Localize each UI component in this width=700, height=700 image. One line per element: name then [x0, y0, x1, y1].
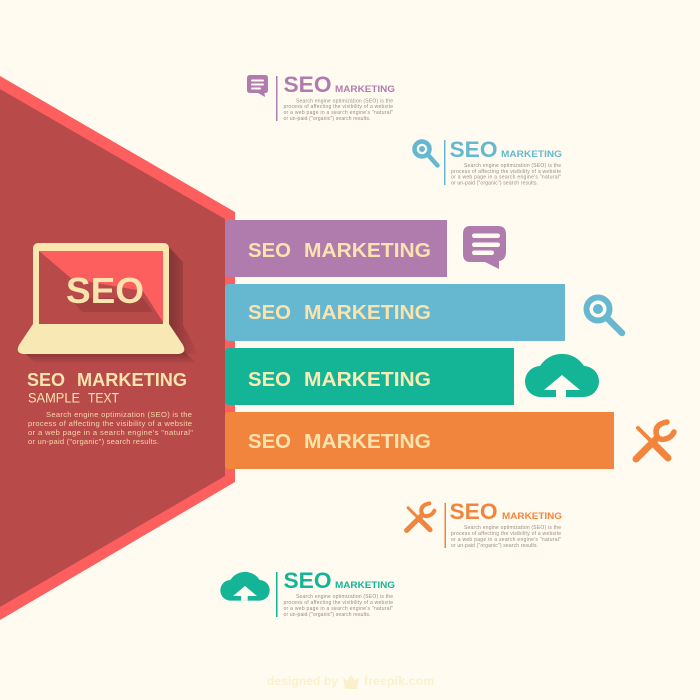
callout: teal: Search engine optimization (SEO) is the [296, 594, 393, 600]
callout: orange [407, 499, 562, 549]
description text: Search engine optimization (SEO) is the [46, 410, 192, 419]
subheading [28, 390, 119, 406]
callout: orange: MARKETING [502, 511, 562, 522]
bar: blue: SEO [248, 301, 291, 324]
callout: teal [220, 568, 395, 618]
description text: or a web page in a search engine's "natural" [28, 428, 193, 437]
bar: teal: MARKETING [304, 368, 431, 391]
blue icon [414, 142, 438, 166]
bar: teal [225, 348, 514, 405]
credit: freepik.com [364, 674, 434, 688]
callout: purple: Search engine optimization (SEO) is the [296, 98, 393, 104]
callout: purple: process of affecting the visibility of a website [284, 104, 393, 110]
callout: teal: or un-paid ("organic") search results. [284, 612, 370, 618]
main heading: MARKETING [77, 369, 187, 390]
callout: purple: or un-paid ("organic") search results. [284, 116, 370, 122]
bar: purple: MARKETING [304, 239, 431, 262]
bar: teal: SEO [248, 368, 291, 391]
callout: purple [247, 72, 395, 122]
laptop label: SEO [66, 270, 144, 311]
icon: laptop with SEO [18, 243, 199, 364]
callout: teal: SEO [284, 568, 332, 593]
icon: chat bubble large [463, 226, 506, 269]
callout: blue: SEO [450, 137, 498, 162]
callout: purple: MARKETING [335, 84, 395, 95]
bar: purple [225, 220, 447, 277]
orange icon [407, 503, 434, 530]
bar: blue: MARKETING [304, 301, 431, 324]
callout: orange: or a web page in a search engine's "natural" [451, 537, 561, 543]
description text: or un-paid ("organic") search results. [28, 437, 159, 446]
panel: red hexagon [0, 76, 235, 620]
callout: purple: SEO [284, 72, 332, 97]
bar: orange: MARKETING [304, 430, 431, 453]
callout: teal: process of affecting the visibility of a website [284, 600, 393, 606]
callout: orange: Search engine optimization (SEO) is the [464, 525, 561, 531]
callout: blue: Search engine optimization (SEO) is the [464, 163, 561, 169]
icon: cloud upload large [525, 354, 599, 397]
credit: designed by [267, 674, 338, 688]
subheading: TEXT [88, 390, 119, 406]
callout: blue: process of affecting the visibility of a website [451, 169, 561, 175]
icon: magnifier large [586, 298, 622, 333]
description text [28, 410, 193, 446]
bar: orange [225, 412, 614, 469]
callout: orange: SEO [450, 499, 498, 524]
bar: purple: SEO [248, 239, 291, 262]
callout: blue [414, 137, 562, 186]
bar: orange: SEO [248, 430, 291, 453]
icon: tools large [636, 422, 674, 459]
callout: teal: or a web page in a search engine's "natural" [284, 606, 393, 612]
callout: orange: or un-paid ("organic") search results. [451, 543, 538, 549]
credit [267, 674, 434, 689]
callout: blue: or a web page in a search engine's "natural" [451, 174, 561, 180]
callout: teal: MARKETING [335, 580, 395, 591]
teal icon [220, 572, 270, 601]
subheading: SAMPLE [28, 390, 80, 406]
bar: blue [225, 284, 565, 341]
main heading [27, 369, 187, 390]
callout: blue: MARKETING [501, 149, 562, 160]
purple icon [247, 75, 268, 97]
description text: process of affecting the visibility of a website [28, 419, 192, 428]
main heading: SEO [27, 369, 65, 390]
callout: blue: or un-paid ("organic") search results. [451, 180, 538, 186]
callout: orange: process of affecting the visibility of a website [451, 531, 561, 537]
callout: purple: or a web page in a search engine's "natural" [284, 110, 393, 116]
